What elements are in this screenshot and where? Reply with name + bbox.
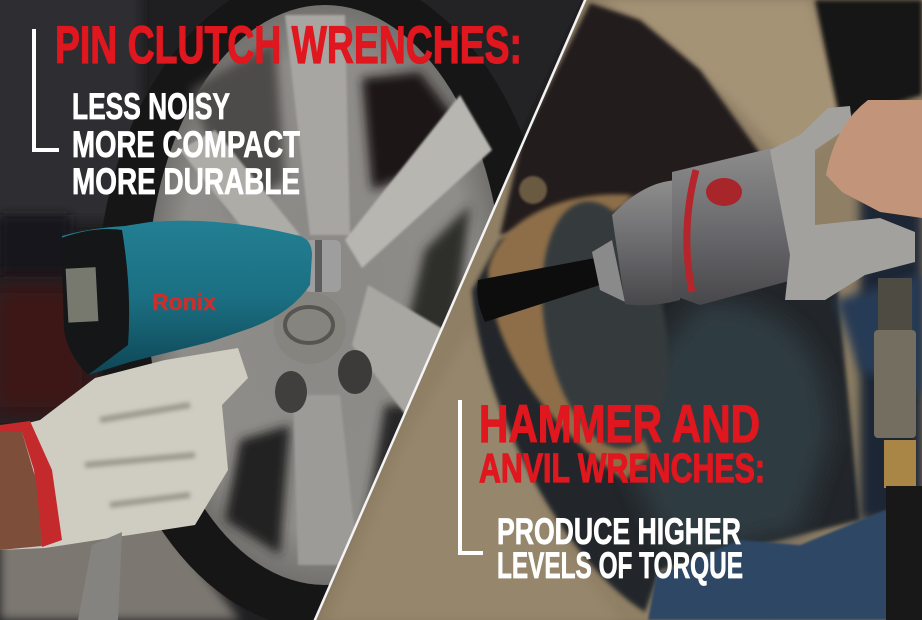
left photo: car wheel — [0, 0, 600, 620]
heading: hammer and anvil wrenches: ANVIL WRENCHES: — [479, 445, 765, 491]
text block: hammer and anvil benefits — [497, 511, 743, 586]
background corner — [815, 0, 922, 120]
heading: hammer and anvil wrenches: HAMMER AND — [479, 395, 760, 454]
icon: gripping hand — [826, 100, 922, 218]
text block: pin clutch benefits: MORE DURABLE — [72, 161, 300, 202]
heading: pin clutch wrenches: PIN CLUTCH WRENCHES: — [55, 16, 522, 75]
tire wall: top — [320, 0, 870, 620]
drum — [488, 194, 650, 480]
wheel rim — [472, 200, 860, 612]
text block: hammer and anvil benefits: LEVELS OF TORQUE — [497, 545, 743, 586]
icon: air coupler — [78, 532, 122, 620]
jeans — [646, 509, 886, 620]
diagonal divider — [314, 0, 586, 620]
icon: Ronix impact wrench: Ronix — [152, 289, 216, 315]
text block: pin clutch benefits: LESS NOISY — [72, 86, 230, 127]
icon: gloved hand — [0, 348, 248, 550]
heading: hammer and anvil wrenches — [479, 395, 765, 491]
text block: hammer and anvil benefits: PRODUCE HIGHER — [497, 511, 741, 552]
text block: pin clutch benefits — [72, 86, 300, 202]
icon: Ronix impact wrench — [61, 221, 312, 375]
icon: Ingersoll Rand impact wrench — [477, 106, 915, 322]
text block: pin clutch benefits: MORE COMPACT — [72, 124, 300, 165]
right photo: truck wheel — [300, 0, 922, 620]
wheel hollow — [500, 3, 765, 235]
bracket: hammer and anvil — [460, 400, 483, 553]
bracket: pin clutch — [34, 29, 59, 150]
icon: air hose — [874, 278, 922, 620]
